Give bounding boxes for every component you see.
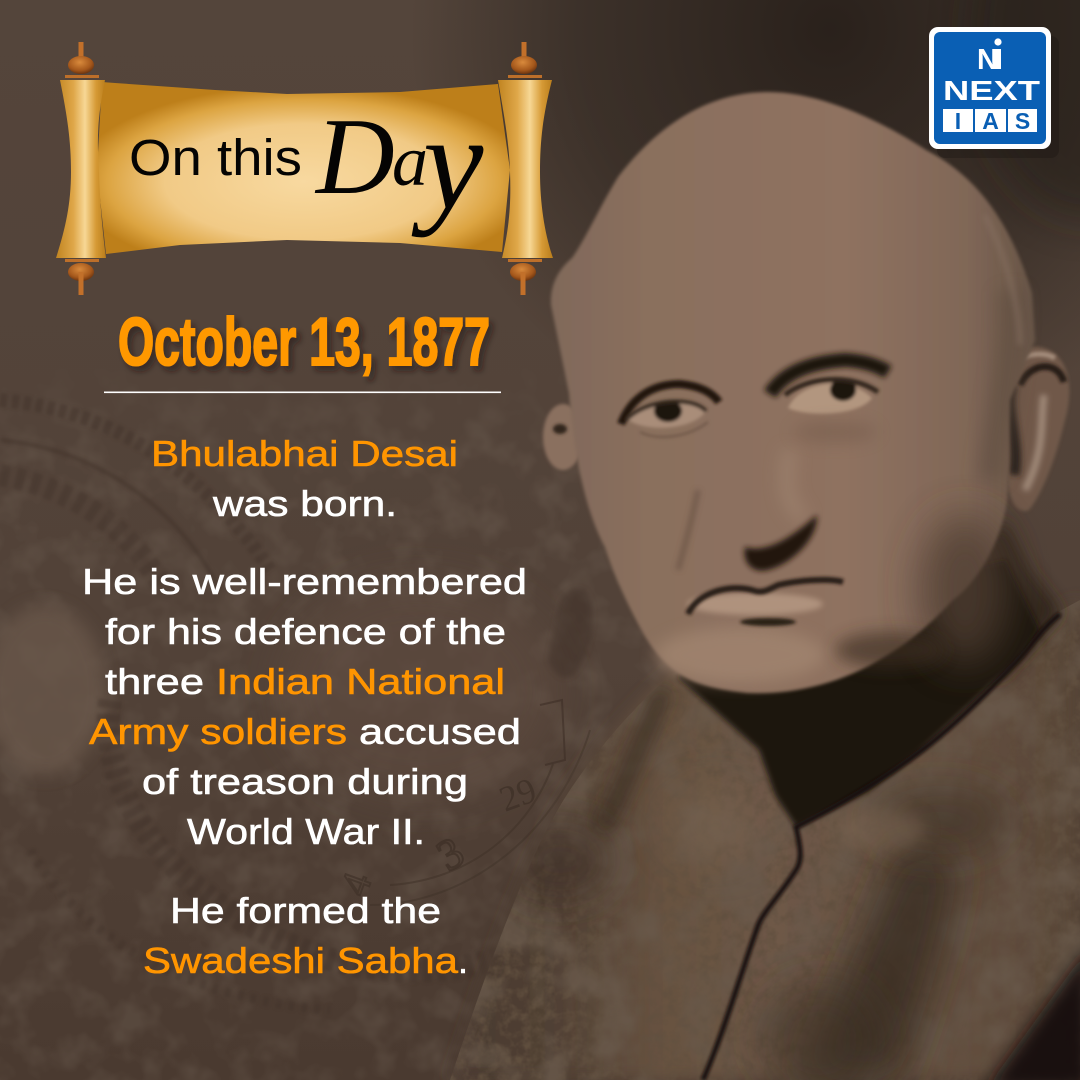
date heading: October 13, 1877 — [118, 304, 490, 380]
left brow — [621, 384, 719, 424]
background pocket watch: 29 — [494, 770, 542, 820]
text block: defence: three — [105, 661, 204, 702]
text block: defence: World War II. — [187, 811, 425, 852]
background pocket watch — [0, 400, 593, 1010]
banner text: Day: y — [411, 88, 484, 238]
text block: defence: Army soldiers — [89, 711, 347, 752]
portrait: left ear — [543, 404, 583, 470]
banner text: On this: On this — [129, 129, 302, 186]
left roller — [56, 80, 106, 258]
logo IAS boxes: I — [955, 108, 961, 134]
logo: NEXT IAS — [929, 27, 1059, 158]
banner text: Day: a — [392, 121, 428, 201]
text block: defence — [82, 561, 527, 852]
top right knob — [508, 42, 542, 78]
top left knob — [65, 42, 99, 78]
logo IAS boxes — [943, 108, 1037, 134]
right eye — [785, 379, 878, 414]
right roller — [498, 80, 553, 258]
bottom right knob — [508, 259, 542, 295]
banner text: Day: D — [314, 96, 395, 217]
logo wordmark: NEXT — [943, 75, 1040, 106]
text block: defence: Indian National — [216, 661, 505, 702]
background pocket watch: 4 — [331, 867, 380, 901]
bottom left knob — [65, 259, 99, 295]
text block: defence: He is well-remembered — [82, 561, 527, 602]
text block: birth: Bhulabhai Desai — [151, 433, 458, 474]
logo IAS boxes: A — [982, 108, 999, 134]
portrait: right ear — [984, 347, 1069, 511]
divider — [104, 392, 501, 393]
text block: Swadeshi Sabha: He formed the — [170, 890, 441, 931]
text block: birth — [151, 433, 458, 524]
text block: defence: accused — [359, 711, 521, 752]
background pocket watch: 3 — [428, 827, 472, 881]
mouth — [687, 580, 843, 626]
portrait: dark neck shadow — [678, 520, 1062, 827]
under-eye shading — [793, 421, 877, 443]
portrait: head and face — [551, 92, 1035, 693]
logo mark: N — [977, 44, 998, 76]
text block: Swadeshi Sabha: . — [458, 940, 468, 981]
text block: Swadeshi Sabha — [143, 890, 468, 981]
text block: defence: of treason during — [142, 761, 468, 802]
text block: birth: was born. — [212, 483, 397, 524]
left eye — [626, 400, 708, 437]
portrait: jacket front opening line — [703, 614, 1060, 1080]
portrait: jacket — [440, 590, 1080, 1080]
text block: Swadeshi Sabha: Swadeshi Sabha — [143, 940, 459, 981]
right brow — [770, 360, 888, 394]
text block: defence: for his defence of the — [105, 611, 506, 652]
logo IAS boxes: S — [1015, 108, 1030, 134]
scroll banner — [56, 42, 553, 295]
nose — [678, 450, 817, 571]
parchment — [97, 82, 510, 254]
